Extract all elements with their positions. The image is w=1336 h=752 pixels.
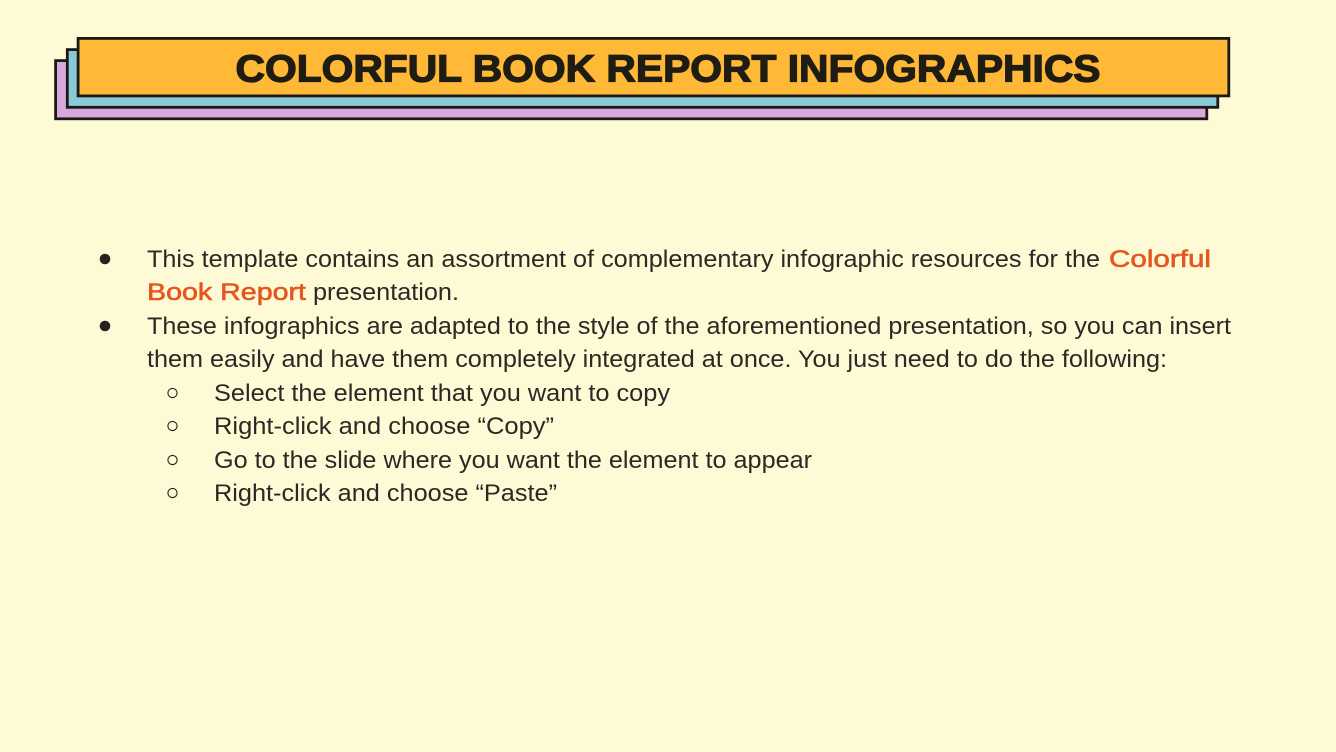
sub-bullet: select: Select the element that you want to copy bbox=[214, 380, 671, 407]
bullet 2: These infographics are adapted to the style of the aforementioned presentation, so you can insert bbox=[147, 313, 1231, 340]
bullet 2: them easily and have them completely integrated at once. You just need to do the following: bbox=[147, 346, 1167, 373]
bullet 1: Book Report bbox=[147, 279, 306, 306]
banner layer: purple bbox=[56, 61, 1207, 119]
bullet 1: This template contains an assortment of complementary infographic resources for the bbox=[147, 246, 1100, 273]
bullet 1: presentation. bbox=[313, 279, 459, 306]
title banner bbox=[56, 38, 1229, 119]
bullet list bbox=[100, 246, 1231, 507]
banner layer: blue bbox=[67, 50, 1218, 107]
bullet 1 bbox=[100, 246, 1211, 306]
bullet 1: Colorful bbox=[1109, 246, 1211, 273]
sub-bullet: go to slide: Go to the slide where you want the element to appear bbox=[214, 447, 812, 474]
sub-bullet: copy: Right-click and choose “Copy” bbox=[214, 413, 554, 440]
bullet 2 bbox=[100, 313, 1231, 373]
banner layer: orange bbox=[78, 38, 1229, 96]
sub-bullet: paste: Right-click and choose “Paste” bbox=[214, 480, 557, 507]
title: COLORFUL BOOK REPORT INFOGRAPHICS bbox=[236, 48, 1100, 90]
